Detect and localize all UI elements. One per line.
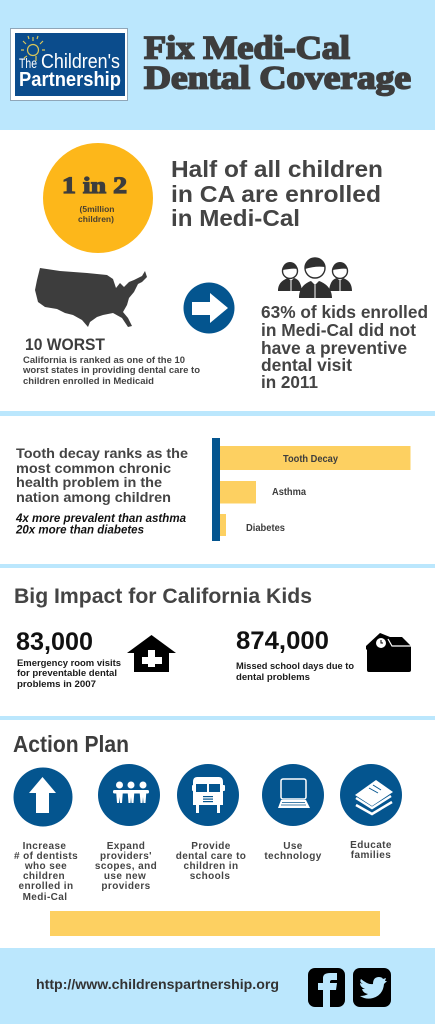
stat: 83,000: Emergency room visits xyxy=(17,658,121,669)
action 2: expand providers: scopes, and xyxy=(95,861,157,872)
icon: people xyxy=(278,258,352,298)
action 2: expand providers: providers' xyxy=(100,851,152,862)
10 worst text: worst states in providing dental care to xyxy=(22,365,200,376)
stat: 83,000: 83,000 xyxy=(16,628,93,656)
10 worst text: 10 WORST xyxy=(25,336,105,354)
action 3: schools: dental care to xyxy=(176,851,246,862)
heading: big impact: Big Impact for California Kids xyxy=(14,585,312,608)
text: 63% of kids: in Medi-Cal did not xyxy=(261,320,416,340)
action 1: increase dentists: Medi-Cal xyxy=(23,892,67,903)
action 2: expand providers: use new xyxy=(104,871,146,882)
title: Dental Coverage xyxy=(144,60,411,96)
action 3: schools: Provide xyxy=(191,841,231,852)
panel: half of children xyxy=(43,143,383,253)
heading: action plan: Action Plan xyxy=(13,731,129,757)
logo: Children's xyxy=(41,51,120,73)
headline: half of all children xyxy=(171,156,383,231)
action 4: technology: Use xyxy=(283,841,303,852)
1 in 2 circle xyxy=(43,143,153,253)
text: 63% of kids: in 2011 xyxy=(261,372,318,392)
icon: hospital xyxy=(127,635,176,672)
1 in 2 circle: 1 in 2 xyxy=(62,173,127,198)
panel: tooth decay text: health problem in the xyxy=(16,474,162,490)
panel: tooth decay text: 4x more prevalent than asthma xyxy=(15,511,186,525)
text: 63% of kids xyxy=(261,302,428,392)
action 2: expand providers: providers xyxy=(101,881,151,892)
headline: half of all children: in Medi-Cal xyxy=(171,205,300,231)
bar chart: Asthma xyxy=(272,487,306,498)
stat: 874,000: Missed school days due to xyxy=(236,661,354,672)
panel: header xyxy=(0,0,435,130)
action 5: educate families xyxy=(340,764,402,861)
10 worst text: children enrolled in Medicaid xyxy=(23,376,154,387)
action 1: increase dentists xyxy=(14,768,78,903)
action 3: schools: schools xyxy=(190,871,230,882)
action 1: increase dentists: enrolled in xyxy=(19,881,73,892)
bar chart: Diabetes xyxy=(246,523,285,534)
icon: US map xyxy=(35,268,147,327)
headline: half of all children: in CA are enrolled xyxy=(171,181,381,207)
icon: facebook xyxy=(308,968,345,1007)
stat: 874,000: dental problems xyxy=(236,672,310,683)
10 worst text xyxy=(22,336,200,387)
action 3: schools xyxy=(176,764,246,882)
panel: tooth decay text: nation among children xyxy=(16,489,171,505)
10 worst text: California is ranked as one of the 10 xyxy=(23,355,185,366)
action 2: expand providers: Expand xyxy=(107,841,145,852)
icon: school xyxy=(366,633,411,672)
panel: tooth decay text: Tooth decay ranks as the xyxy=(16,445,188,461)
action 5: educate families: families xyxy=(351,850,391,861)
panel: tooth decay text: most common chronic xyxy=(16,460,171,476)
logo: The xyxy=(19,56,37,71)
icon: twitter xyxy=(353,968,391,1007)
action 2: expand providers xyxy=(95,764,160,892)
title: Fix Medi-Cal xyxy=(144,30,350,66)
text: 63% of kids: dental visit xyxy=(261,355,352,375)
logo xyxy=(10,28,128,100)
action 5: educate families: Educate xyxy=(350,840,392,851)
yellow banner xyxy=(50,911,380,936)
1 in 2 circle: (5million xyxy=(80,204,114,214)
stat: 83,000: for preventable dental xyxy=(17,668,117,679)
bar chart: Tooth Decay xyxy=(283,454,338,465)
text: 63% of kids: 63% of kids enrolled xyxy=(261,302,428,322)
stat: 83,000 xyxy=(16,628,121,690)
panel: footer xyxy=(0,948,435,1024)
headline: half of all children: Half of all children xyxy=(171,156,383,182)
panel: tooth decay text xyxy=(15,445,188,536)
bar chart xyxy=(212,438,410,541)
action 4: technology xyxy=(262,764,324,862)
action 1: increase dentists: # of dentists xyxy=(14,851,78,862)
text: 63% of kids: have a preventive xyxy=(261,338,407,358)
logo: Partnership xyxy=(19,69,121,91)
title xyxy=(144,30,411,96)
panel: tooth decay text: 20x more than diabetes xyxy=(15,522,144,536)
icon: arrow circle xyxy=(184,282,234,334)
stat: 83,000: problems in 2007 xyxy=(17,679,96,690)
action 4: technology: technology xyxy=(264,851,322,862)
stat: 874,000: 874,000 xyxy=(236,627,329,655)
action 1: increase dentists: Increase xyxy=(23,841,66,852)
stat: 874,000 xyxy=(236,627,354,683)
website url: http://www.childrenspartnership.org xyxy=(36,976,279,992)
action 1: increase dentists: who see xyxy=(24,861,67,872)
1 in 2 circle: children) xyxy=(78,214,114,224)
action 3: schools: children in xyxy=(184,861,238,872)
action 1: increase dentists: children xyxy=(23,871,65,882)
